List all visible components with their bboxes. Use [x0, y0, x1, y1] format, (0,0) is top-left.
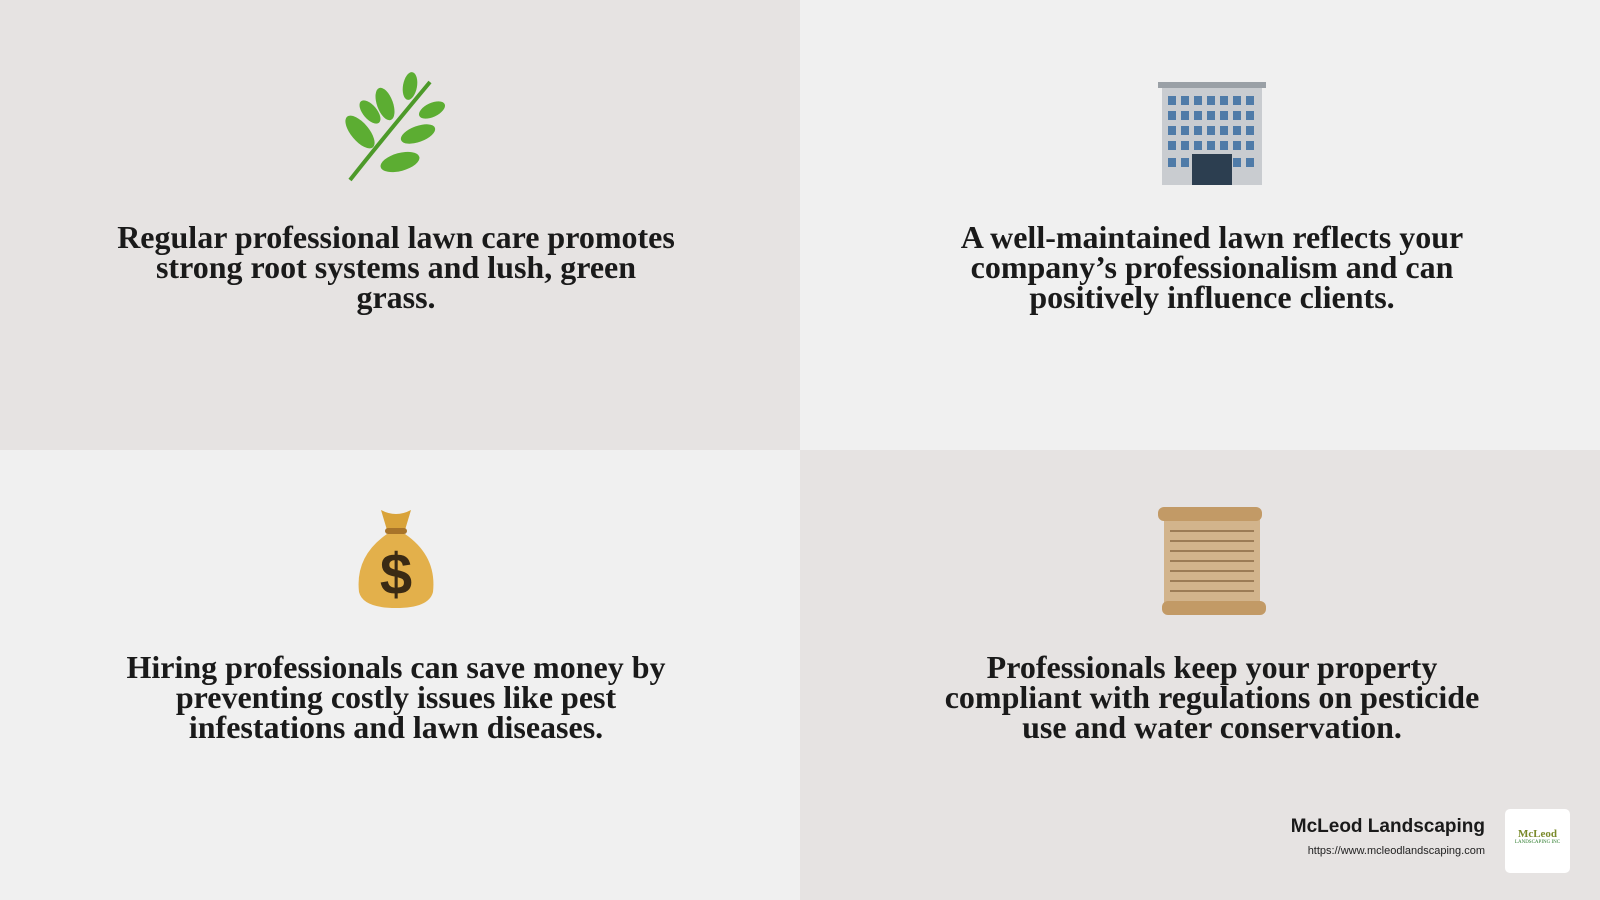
text: save money [126, 649, 666, 745]
logo: McLeod [1518, 828, 1557, 840]
brand name: McLeod Landscaping [1291, 816, 1485, 837]
panel: root systems [0, 0, 800, 450]
panel: save money [0, 450, 800, 900]
logo: LANDSCAPING INC [1515, 840, 1560, 845]
text: save money: infestations and lawn diseases. [189, 709, 603, 745]
icon: office building [1158, 82, 1266, 185]
text: compliance: compliant with regulations on pesticide [945, 679, 1479, 715]
text: root systems [117, 219, 675, 315]
text: root systems: Regular professional lawn care promotes [117, 219, 675, 255]
brand url: https://www.mcleodlandscaping.com [1308, 845, 1485, 857]
logo [1505, 809, 1570, 873]
text: professionalism: company’s professionalism and can [971, 249, 1453, 285]
icon: leaf sprig [345, 72, 445, 182]
text: root systems: strong root systems and lush, green [156, 249, 636, 285]
text: professionalism: positively influence clients. [1029, 279, 1395, 315]
icon: money bag [358, 510, 434, 608]
text: compliance: use and water conservation. [1022, 709, 1402, 745]
text: save money: preventing costly issues like pest [176, 679, 616, 715]
panel: professionalism [800, 0, 1600, 450]
icon: scroll [1158, 507, 1266, 615]
text: root systems: grass. [356, 279, 436, 315]
brand block [1291, 809, 1570, 873]
text: professionalism: A well-maintained lawn reflects your [961, 219, 1463, 255]
text: compliance: Professionals keep your property [987, 649, 1437, 685]
text: compliance [945, 649, 1479, 745]
panel: compliance [800, 450, 1600, 900]
icon: money bag: $ [380, 542, 412, 607]
text: professionalism [961, 219, 1463, 315]
text: save money: Hiring professionals can save money by [126, 649, 666, 685]
